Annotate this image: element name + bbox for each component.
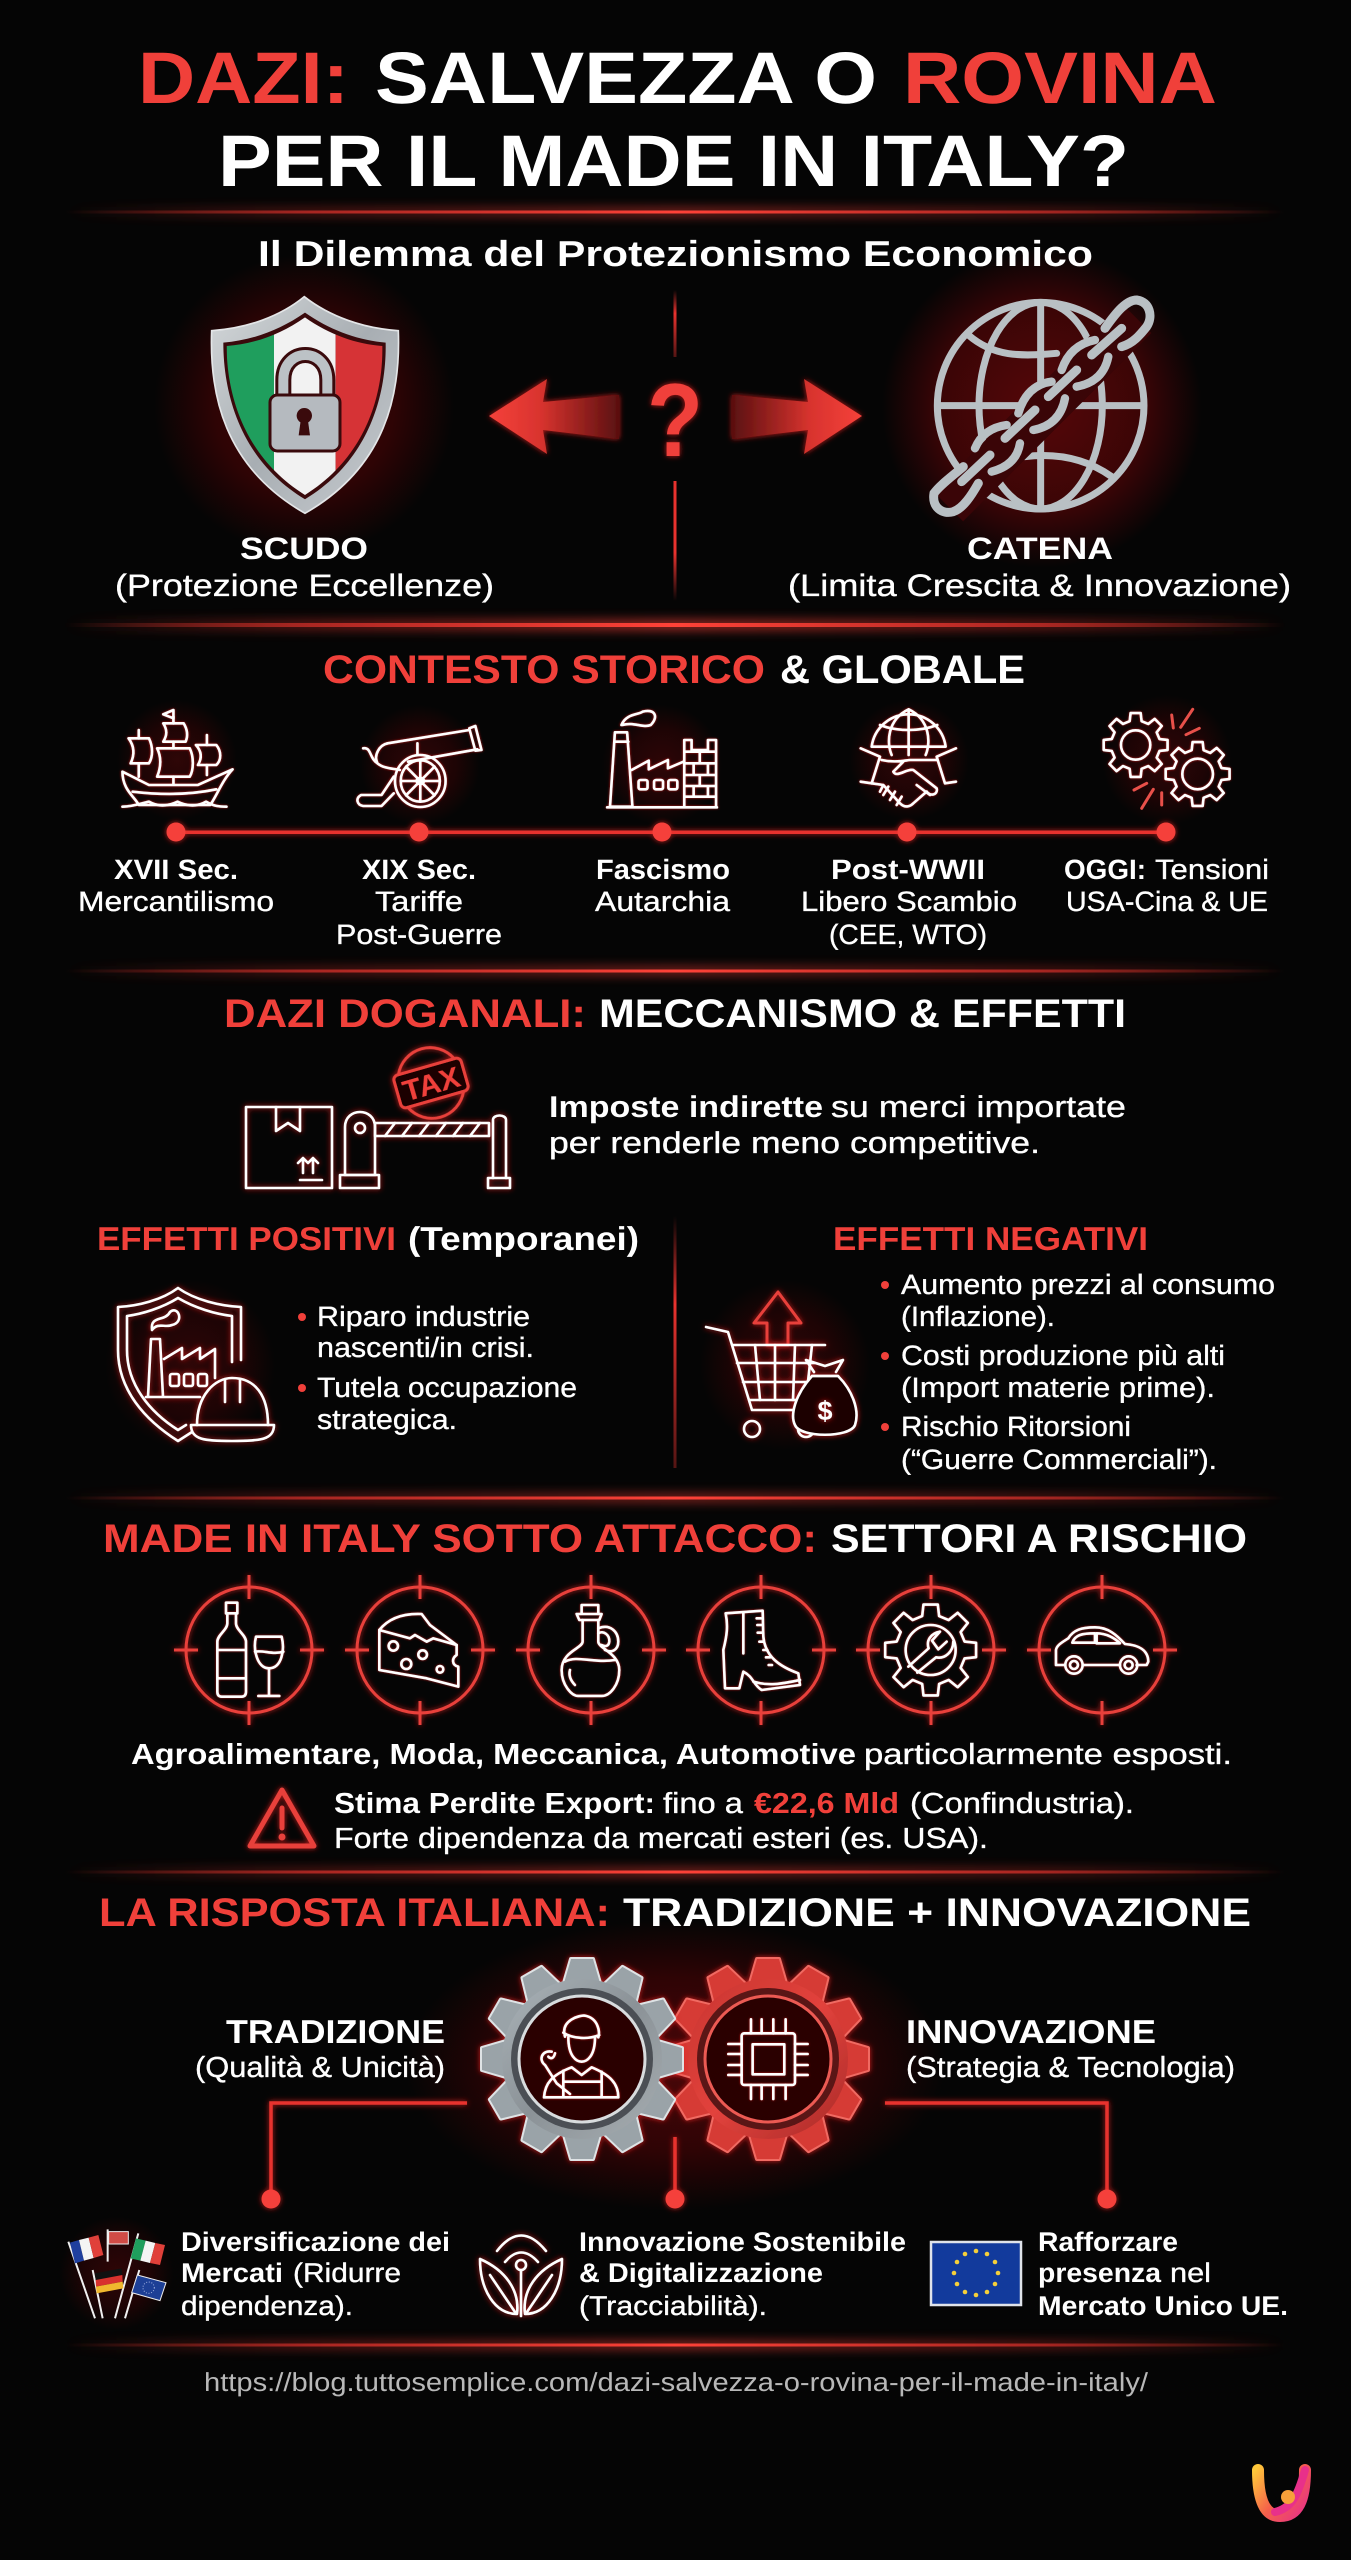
list: effetti positivi: Tutela occupazione xyxy=(317,1372,577,1403)
heading: effetti positivi xyxy=(97,1220,639,1257)
icon: flags xyxy=(60,2217,173,2330)
list: effetti positivi: nascenti/in crisi. xyxy=(317,1332,534,1363)
title: PER IL MADE IN ITALY? xyxy=(218,121,1129,202)
label: oggi xyxy=(1064,854,1269,917)
icon: warning triangle xyxy=(250,1790,314,1846)
label: fascismo xyxy=(595,854,730,917)
title xyxy=(138,38,1217,202)
target: moda xyxy=(686,1575,836,1725)
icon: box, barrier and tax stamp: TAX xyxy=(399,1061,464,1108)
gear: tradizione xyxy=(482,1959,682,2159)
label: innovazione: INNOVAZIONE xyxy=(906,2013,1156,2050)
title: SALVEZZA O xyxy=(375,38,877,119)
label: xix secolo: Post-Guerre xyxy=(336,919,502,950)
label: catena: CATENA xyxy=(967,531,1113,566)
label: fascismo: Fascismo xyxy=(596,854,730,885)
text: settori esposti: Agroalimentare, Moda, Meccanica, Automotive xyxy=(131,1739,856,1771)
heading: contesto storico: & GLOBALE xyxy=(780,648,1025,692)
text: innovazione sostenibile: Innovazione Sostenibile xyxy=(579,2227,906,2257)
label: innovazione: (Strategia & Tecnologia) xyxy=(906,2052,1235,2084)
icon: eu flag xyxy=(931,2242,1021,2305)
label: oggi: Tensioni xyxy=(1155,854,1269,885)
source url: https://blog.tuttosemplice.com/dazi-salvezza-o-rovina-per-il-made-in-italy/ xyxy=(204,2367,1149,2397)
text: settori esposti xyxy=(131,1739,1232,1771)
panel: effetti negativi xyxy=(700,1220,1275,1475)
list: effetti positivi: Riparo industrie xyxy=(317,1301,530,1332)
label: post-wwii: Post-WWII xyxy=(831,854,985,885)
label: catena: (Limita Crescita & Innovazione) xyxy=(788,568,1291,603)
icon: globe and chain xyxy=(934,300,1150,512)
gear: innovazione xyxy=(668,1959,868,2159)
icon: clashing gears xyxy=(1102,695,1232,825)
text: diversificazione: (Ridurre xyxy=(293,2258,401,2288)
callout: stima perdite export xyxy=(334,1788,1134,1855)
panel: dilemma xyxy=(115,290,1291,603)
callout: stima perdite export: €22,6 Mld xyxy=(754,1788,899,1820)
heading: effetti positivi: (Temporanei) xyxy=(408,1220,639,1257)
arrow: right xyxy=(732,379,862,454)
arrow: left xyxy=(489,379,619,454)
label: oggi: OGGI: xyxy=(1064,854,1146,885)
text: definizione dazi: su merci importate xyxy=(831,1091,1126,1124)
text: definizione dazi: Imposte indirette xyxy=(549,1091,823,1124)
label: innovazione xyxy=(906,2013,1235,2084)
label: xvii secolo: XVII Sec. xyxy=(114,854,238,885)
target: vino xyxy=(174,1575,324,1725)
target: meccanica xyxy=(856,1575,1006,1725)
heading: la risposta italiana xyxy=(99,1891,1251,1935)
label: scudo: (Protezione Eccellenze) xyxy=(115,568,494,603)
text: definizione dazi: per renderle meno competitive. xyxy=(549,1127,1040,1160)
heading: made in italy sotto attacco xyxy=(103,1517,1247,1561)
text: diversificazione: Diversificazione dei xyxy=(181,2227,450,2257)
label: tradizione: TRADIZIONE xyxy=(226,2013,445,2050)
heading: contesto storico: CONTESTO STORICO xyxy=(323,648,765,692)
text: mercato unico: Mercato Unico UE. xyxy=(1038,2291,1288,2321)
heading: dazi doganali: MECCANISMO & EFFETTI xyxy=(599,992,1126,1036)
label: xix secolo xyxy=(336,854,502,950)
question mark: ? xyxy=(647,363,703,479)
text: diversificazione xyxy=(181,2227,450,2321)
connectors xyxy=(262,2103,1116,2208)
heading: dazi doganali: DAZI DOGANALI: xyxy=(224,992,586,1036)
icon: worker xyxy=(542,2016,618,2097)
divider: settori xyxy=(65,1867,1285,1877)
target: olio xyxy=(516,1575,666,1725)
icon: shield with padlock xyxy=(211,297,399,513)
heading: contesto storico xyxy=(323,648,1025,692)
text: mercato unico: presenza xyxy=(1038,2258,1162,2288)
heading: effetti positivi: EFFETTI POSITIVI xyxy=(97,1220,396,1257)
text: mercato unico: Rafforzare xyxy=(1038,2227,1178,2257)
label: xvii secolo xyxy=(78,854,274,917)
label: fascismo: Autarchia xyxy=(595,886,730,917)
panel: risposta italiana xyxy=(60,1959,1288,2330)
heading: la risposta italiana: LA RISPOSTA ITALIANA: xyxy=(99,1891,610,1935)
icon: shopping cart and money bag: $ xyxy=(817,1396,833,1426)
label: scudo: SCUDO xyxy=(240,531,368,566)
title: ROVINA xyxy=(903,38,1217,119)
heading: made in italy sotto attacco: MADE IN ITALY SOTTO ATTACCO: xyxy=(103,1517,817,1561)
icon: shield, factory and helmet xyxy=(105,1280,275,1450)
list: effetti positivi xyxy=(298,1301,577,1435)
text: mercato unico: nel xyxy=(1170,2258,1211,2288)
text: diversificazione: dipendenza). xyxy=(181,2291,353,2321)
label: catena xyxy=(788,531,1291,603)
icon: box, barrier and tax stamp xyxy=(246,1039,510,1188)
heading: made in italy sotto attacco: SETTORI A RISCHIO xyxy=(831,1517,1247,1561)
label: tradizione xyxy=(195,2013,445,2084)
label: post-wwii xyxy=(801,854,1017,950)
panel: settori a rischio xyxy=(174,1575,1177,1725)
label: xix secolo: Tariffe xyxy=(375,886,463,917)
panel: effetti positivi xyxy=(97,1220,639,1450)
heading: effetti negativi: EFFETTI NEGATIVI xyxy=(833,1220,1148,1257)
panel: timeline xyxy=(78,695,1269,950)
heading: dazi doganali xyxy=(224,992,1126,1036)
label: oggi: USA-Cina & UE xyxy=(1066,886,1268,917)
icon: cannon xyxy=(357,705,481,825)
vertical divider: effetti xyxy=(674,1216,676,1468)
icon: chip xyxy=(728,2019,808,2099)
icon: shopping cart and money bag xyxy=(700,1280,870,1450)
title: DAZI: xyxy=(138,38,349,119)
list: effetti negativi xyxy=(881,1269,1275,1475)
text: definizione dazi xyxy=(549,1091,1126,1160)
list: effetti negativi: Aumento prezzi al consumo xyxy=(901,1269,1275,1300)
text: innovazione sostenibile: (Tracciabilità). xyxy=(579,2291,767,2321)
icon: ship xyxy=(117,700,237,820)
divider: risposta xyxy=(65,2340,1285,2350)
text: innovazione sostenibile xyxy=(579,2227,906,2321)
timeline line and dots xyxy=(166,822,1176,842)
label: scudo xyxy=(115,531,494,603)
callout: stima perdite export: Stima Perdite Export: xyxy=(334,1788,655,1820)
label: xix secolo: XIX Sec. xyxy=(362,854,476,885)
heading: la risposta italiana: TRADIZIONE + INNOVAZIONE xyxy=(623,1891,1251,1935)
callout: stima perdite export: (Confindustria). xyxy=(910,1788,1134,1820)
label: tradizione: (Qualità & Unicità) xyxy=(195,2052,445,2084)
label: post-wwii: Libero Scambio xyxy=(801,886,1017,917)
callout: stima perdite export: Forte dipendenza da mercati esteri (es. USA). xyxy=(334,1823,988,1855)
icon: handshake and globe xyxy=(849,700,969,820)
subtitle: Il Dilemma del Protezionismo Economico xyxy=(258,233,1093,274)
list: effetti negativi: Costi produzione più alti xyxy=(901,1340,1225,1371)
vertical divider: dilemma xyxy=(674,290,676,601)
list: effetti negativi: (Inflazione). xyxy=(901,1301,1055,1332)
list: effetti positivi: strategica. xyxy=(317,1404,457,1435)
icon: factory xyxy=(602,705,722,825)
label: xvii secolo: Mercantilismo xyxy=(78,886,274,917)
icon: wifi and leaves xyxy=(480,2236,562,2316)
text: diversificazione: Mercati xyxy=(181,2258,283,2288)
divider: dilemma xyxy=(65,619,1285,631)
text: settori esposti: particolarmente esposti. xyxy=(864,1739,1232,1771)
target: automotive xyxy=(1027,1575,1177,1725)
list: effetti negativi: (Import materie prime). xyxy=(901,1372,1215,1403)
divider: timeline xyxy=(65,966,1285,976)
list: effetti negativi: (“Guerre Commerciali”). xyxy=(901,1444,1217,1475)
text: mercato unico xyxy=(1038,2227,1288,2321)
target: formaggio xyxy=(345,1575,495,1725)
list: effetti negativi: Rischio Ritorsioni xyxy=(901,1411,1131,1442)
callout: stima perdite export: fino a xyxy=(663,1788,744,1820)
divider: title xyxy=(65,207,1285,217)
divider: effetti xyxy=(65,1493,1285,1503)
text: innovazione sostenibile: & Digitalizzazione xyxy=(579,2258,823,2288)
label: post-wwii: (CEE, WTO) xyxy=(829,919,987,950)
icon: logo xyxy=(1258,2470,1305,2516)
